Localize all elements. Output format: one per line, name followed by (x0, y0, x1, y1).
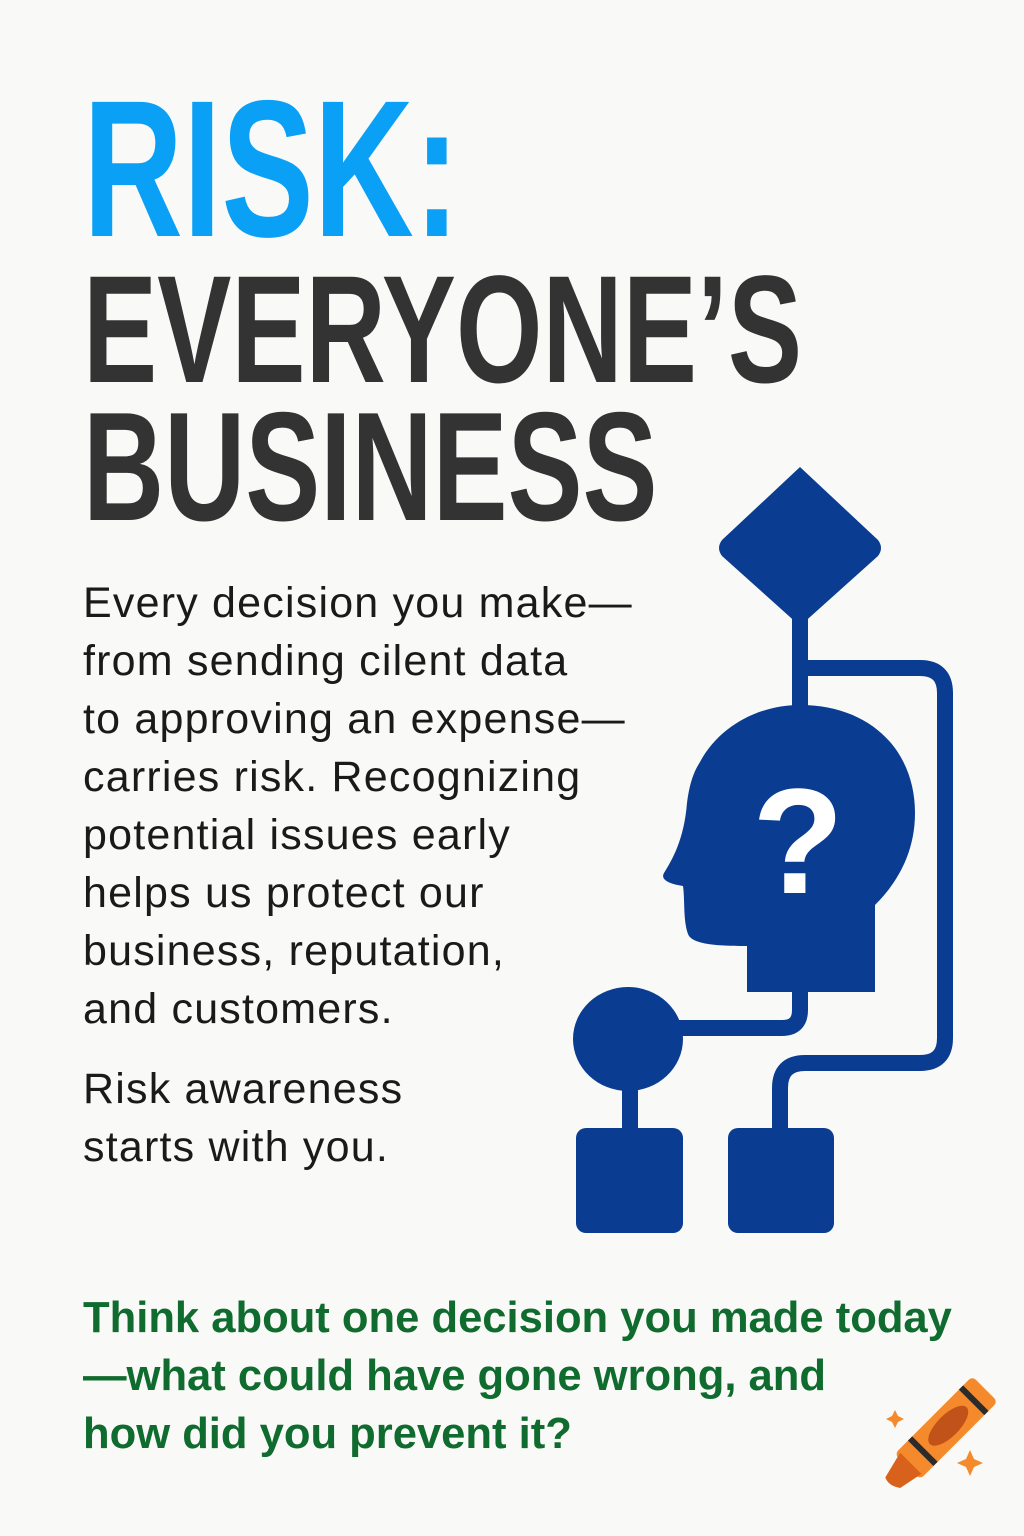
icon: question mark: ? (752, 757, 844, 925)
title line: everyone's: EVERYONE’S (83, 244, 802, 415)
boxes (576, 1128, 683, 1233)
circle (573, 987, 683, 1091)
title line: RISK: RISK: (83, 60, 460, 278)
question prompt: Think about one decision you made today (83, 1293, 952, 1342)
body text: carries risk. Recognizing (83, 753, 581, 801)
title line: business: BUSINESS (83, 380, 658, 553)
body text: helps us protect our (83, 869, 485, 917)
diamond (719, 467, 881, 626)
body text: business, reputation, (83, 927, 505, 975)
body text: and customers. (83, 985, 394, 1033)
body text: Every decision you make— (83, 579, 633, 627)
question prompt: how did you prevent it? (83, 1409, 572, 1458)
closing text: starts with you. (83, 1123, 389, 1171)
icon: crayon (885, 1378, 996, 1488)
head (663, 705, 915, 992)
question prompt (83, 1293, 952, 1458)
body text: from sending cilent data (83, 637, 568, 685)
body text: potential issues early (83, 811, 511, 859)
title (83, 60, 802, 553)
body text (83, 579, 633, 1033)
closing text (83, 1065, 403, 1171)
question prompt: —what could have gone wrong, and (83, 1351, 826, 1400)
closing text: Risk awareness (83, 1065, 403, 1113)
body text: to approving an expense— (83, 695, 626, 743)
